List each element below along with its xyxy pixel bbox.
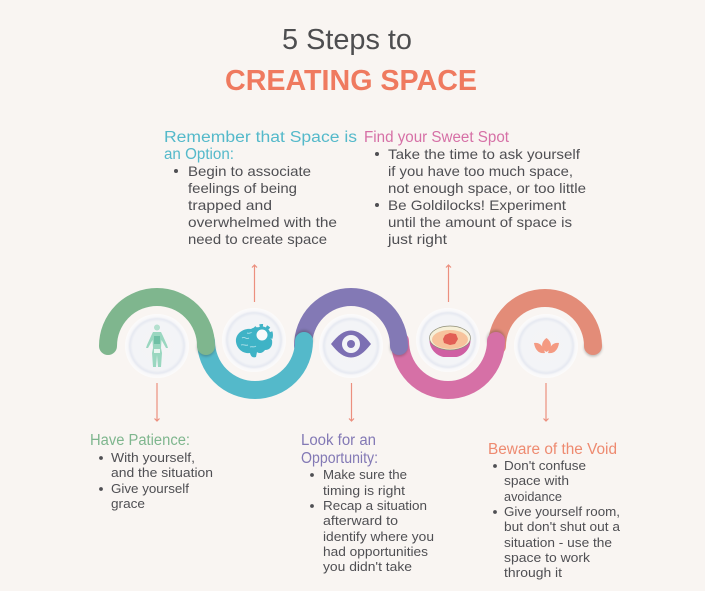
bullet list: Take the time to ask yourself bbox=[388, 146, 580, 162]
circle: step 3 bbox=[319, 314, 383, 378]
heading: Opportunity: bbox=[301, 450, 378, 467]
bullet list: and the situation bbox=[111, 465, 213, 480]
arrow: step 3 down bbox=[349, 383, 354, 421]
text block: beware of the void bbox=[488, 441, 621, 580]
bullet list: avoidance bbox=[504, 489, 562, 504]
heading: Beware of the Void bbox=[488, 441, 617, 458]
bullet list: Give yourself room, bbox=[504, 504, 620, 519]
circle: step 2 bbox=[222, 308, 286, 372]
heading: an Option: bbox=[164, 146, 234, 163]
bullet list: afterward to bbox=[323, 513, 398, 528]
bullet list: until the amount of space is bbox=[388, 214, 572, 230]
bullet list: Be Goldilocks! Experiment bbox=[388, 197, 566, 213]
icon: brain with gear bbox=[236, 326, 272, 357]
bullet list: situation - use the bbox=[504, 535, 612, 550]
arrow: step 2 up bbox=[252, 265, 257, 302]
arrow: step 5 down bbox=[544, 383, 548, 421]
bullet list bbox=[493, 458, 621, 580]
heading bbox=[301, 432, 378, 467]
circle: step 4 bbox=[416, 308, 480, 372]
segment: teal arc bbox=[206, 341, 304, 390]
bullet list bbox=[99, 450, 213, 511]
wave timeline bbox=[108, 297, 602, 390]
icon: bowl bbox=[430, 326, 470, 357]
text block: remember that space is an option bbox=[164, 129, 357, 247]
heading: Remember that Space is bbox=[164, 129, 357, 146]
segment: purple arc bbox=[303, 297, 399, 346]
icon: human body bbox=[146, 324, 168, 367]
bullet list: overwhelmed with the bbox=[188, 214, 337, 230]
bullet list bbox=[375, 146, 586, 247]
title bbox=[225, 24, 477, 97]
bullet list: space to work bbox=[504, 550, 591, 565]
bullet list: Don't confuse bbox=[504, 458, 586, 473]
title line one: 5 Steps to bbox=[282, 24, 412, 56]
bullet list: just right bbox=[387, 231, 447, 247]
bullet list: With yourself, bbox=[111, 450, 195, 465]
heading: Find your Sweet Spot bbox=[364, 129, 510, 146]
bullet list: trapped and bbox=[188, 197, 272, 213]
bullet list: Give yourself bbox=[111, 481, 189, 496]
segment: salmon arc bbox=[497, 298, 593, 346]
bullet list: not enough space, or too little bbox=[388, 180, 586, 196]
heading: Look for an bbox=[301, 432, 376, 449]
text block: look for an opportunity bbox=[301, 432, 434, 574]
bullet list: feelings of being bbox=[188, 180, 297, 196]
bullet list: timing is right bbox=[323, 483, 405, 498]
bullet list: Begin to associate bbox=[188, 163, 311, 179]
bullet list: you didn't take bbox=[323, 559, 412, 574]
bullet list: Recap a situation bbox=[323, 498, 427, 513]
icon: eye bbox=[331, 330, 371, 358]
bullet list: need to create space bbox=[188, 231, 327, 247]
circle: step 5 bbox=[514, 314, 578, 378]
bullet list: but don't shut out a bbox=[504, 519, 621, 534]
circle: step 1 bbox=[125, 314, 189, 378]
bullet list: space with bbox=[504, 473, 569, 488]
bullet list: grace bbox=[111, 496, 145, 511]
bullet list bbox=[310, 467, 434, 574]
segment: pink arc bbox=[400, 341, 496, 390]
bullet list: had opportunities bbox=[323, 544, 429, 559]
bullet list bbox=[174, 163, 337, 247]
text block: have patience bbox=[90, 432, 213, 511]
arrow: step 4 up bbox=[446, 265, 451, 302]
title line two: CREATING SPACE bbox=[225, 65, 477, 97]
heading bbox=[164, 129, 357, 163]
heading: Have Patience: bbox=[90, 432, 190, 449]
arrow: step 1 down bbox=[154, 383, 160, 421]
text block: find your sweet spot bbox=[364, 129, 586, 247]
bullet list: if you have too much space, bbox=[388, 163, 573, 179]
bullet list: through it bbox=[504, 565, 562, 580]
bullet list: Make sure the bbox=[323, 467, 407, 482]
segment: green arc bbox=[108, 297, 206, 346]
icon: lotus bbox=[534, 338, 559, 353]
bullet list: identify where you bbox=[323, 529, 434, 544]
